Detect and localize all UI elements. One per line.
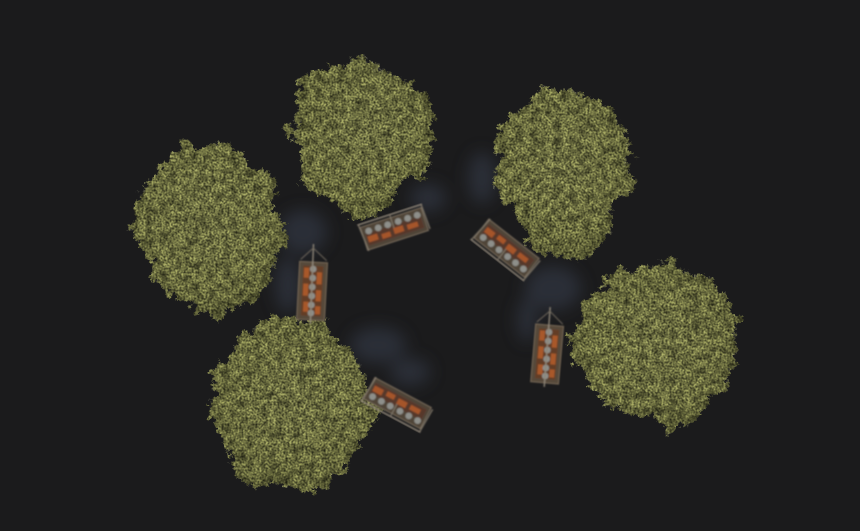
tree: left <box>132 144 281 312</box>
tree: bottom right <box>575 262 737 432</box>
table: lower right <box>530 306 565 388</box>
smoke plumes <box>275 152 581 386</box>
tree: top right <box>494 88 630 258</box>
tree: top centre <box>294 63 434 214</box>
tree: bottom left <box>210 322 376 492</box>
table: bottom centre <box>360 376 434 432</box>
table: left <box>296 243 328 325</box>
table: top centre <box>357 204 431 252</box>
table: upper right <box>471 217 541 281</box>
